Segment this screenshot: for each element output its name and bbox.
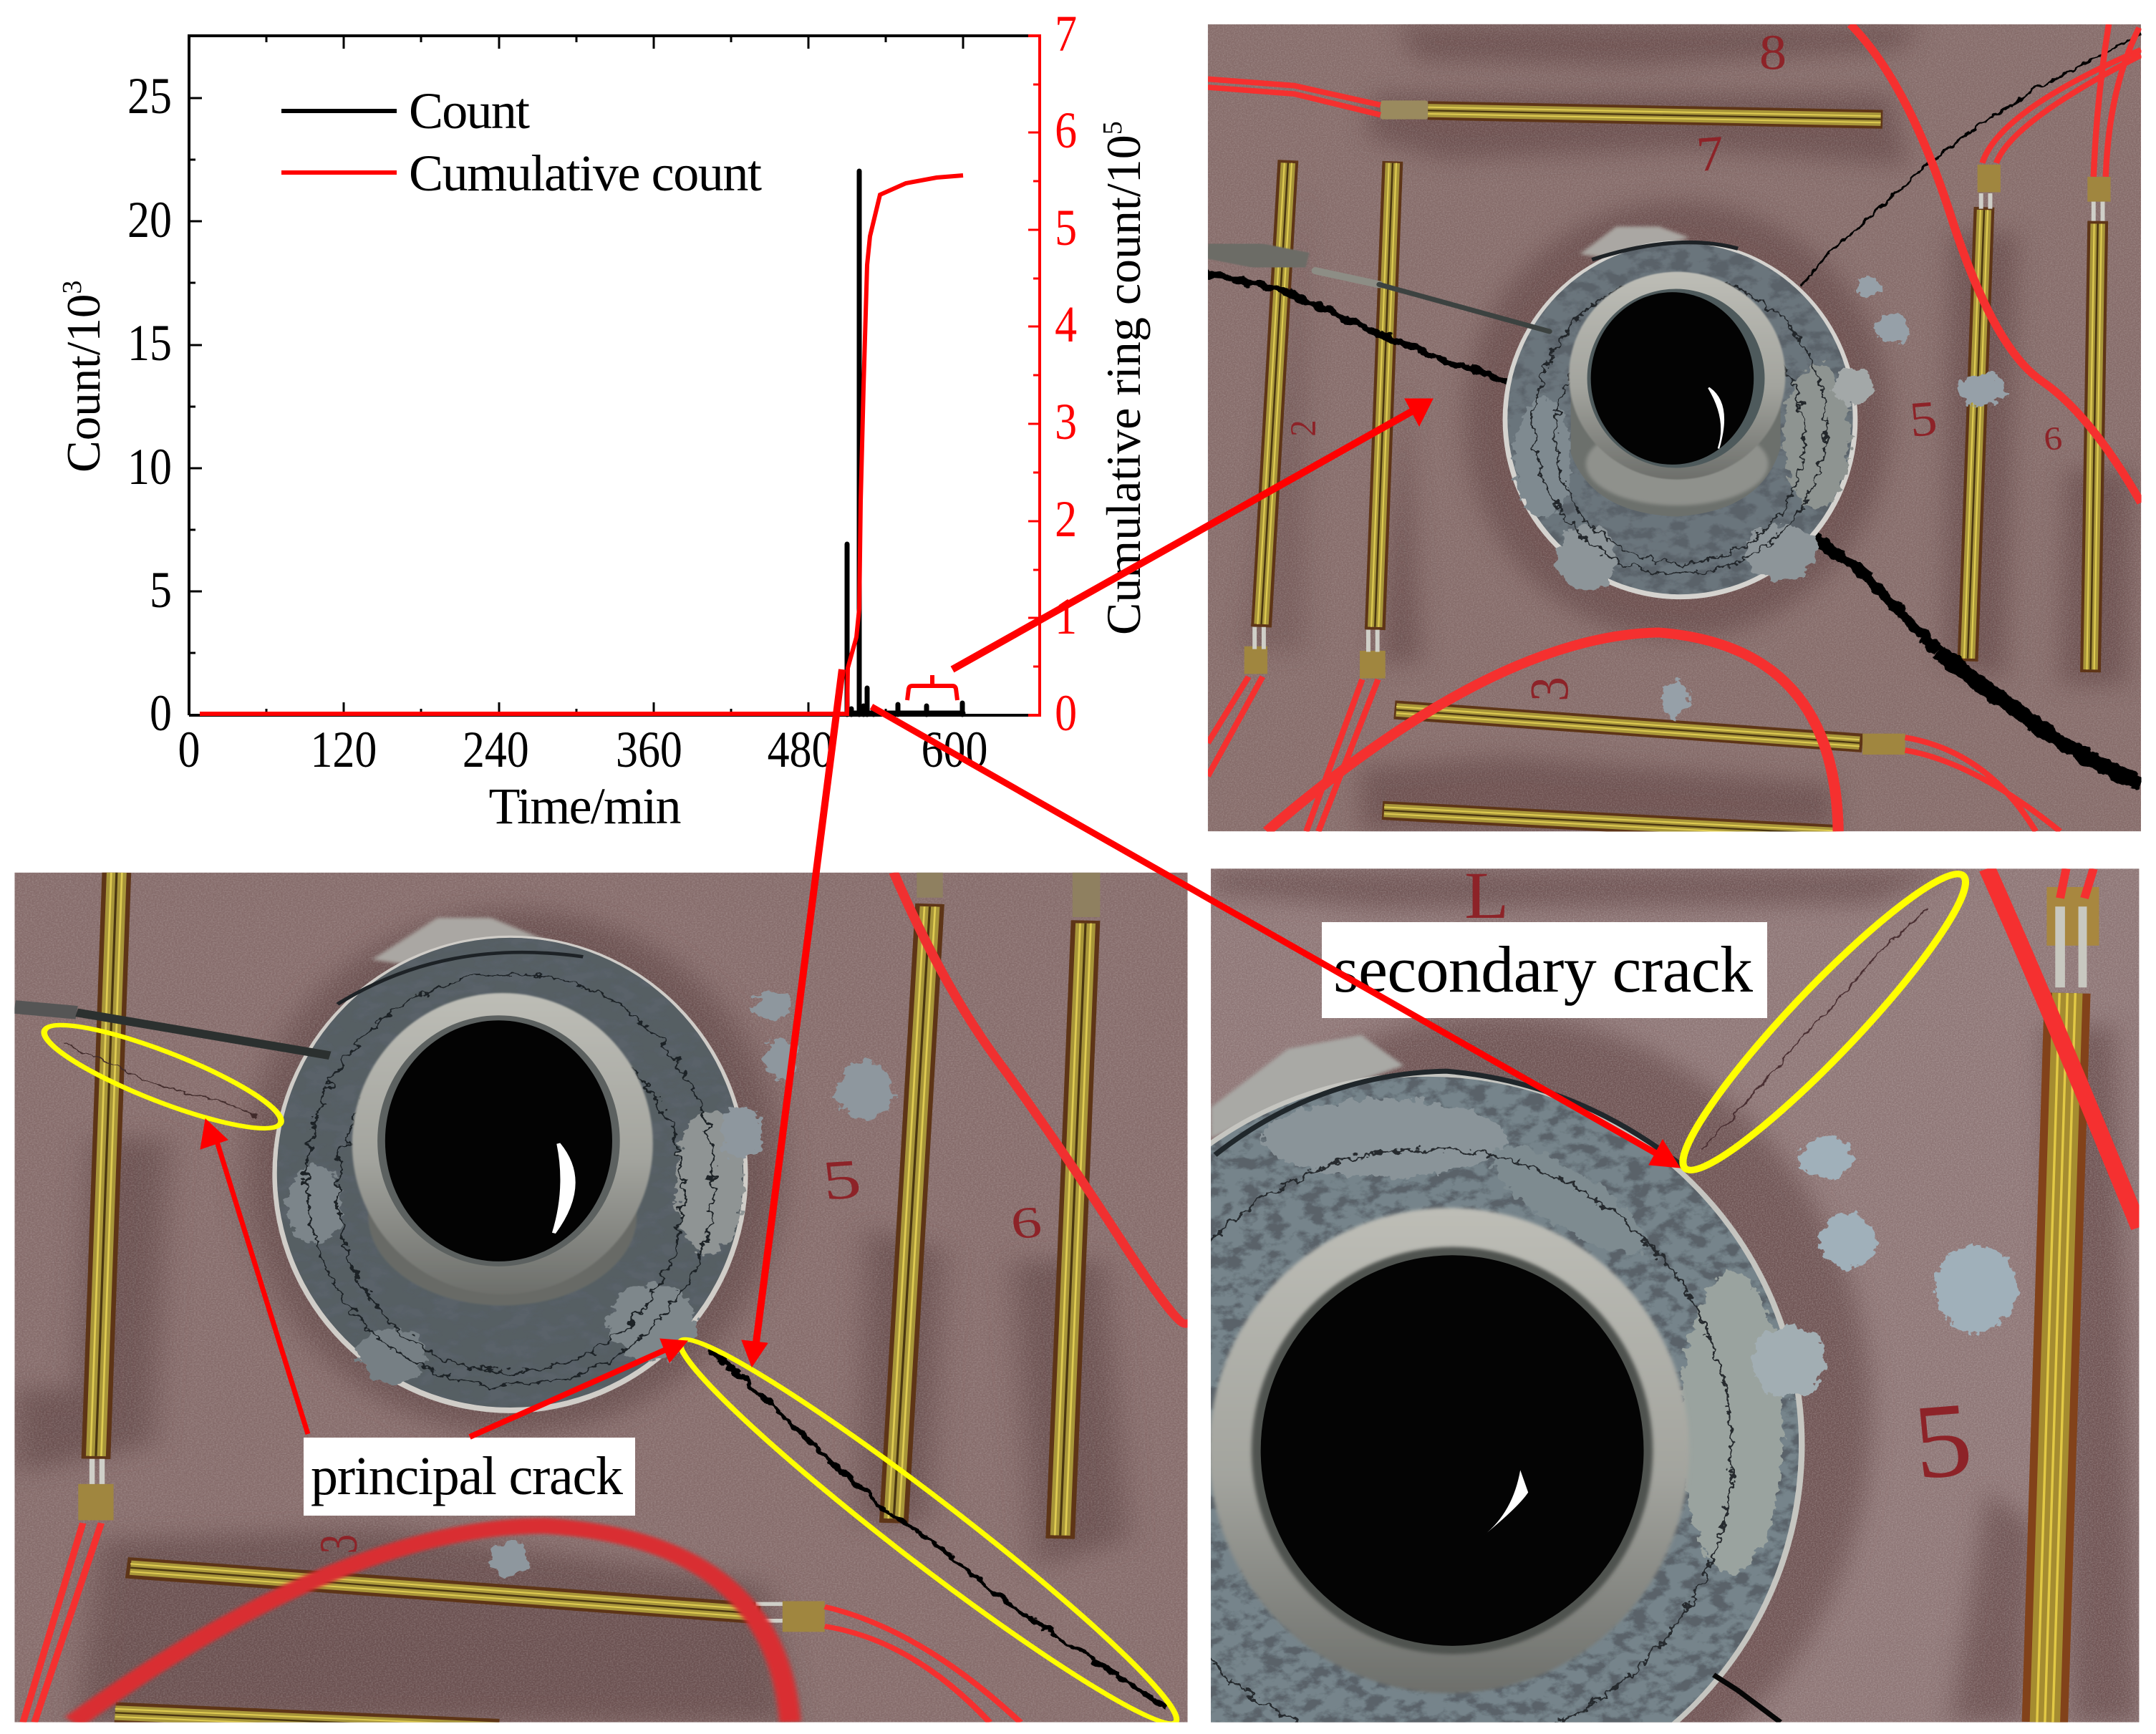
concrete background xyxy=(14,873,1188,1723)
damp stains xyxy=(1118,868,2139,1734)
damp stains xyxy=(1239,24,2133,831)
handwritten gauge numbers: 3 xyxy=(1519,677,1580,702)
left axis tick labels: 15 xyxy=(127,314,172,372)
concrete background xyxy=(1208,24,2141,831)
left axis tick labels: 5 xyxy=(150,561,172,619)
cumulative count series xyxy=(200,175,963,714)
concrete speckle xyxy=(14,873,1188,1723)
crack fragment at pipe base xyxy=(1713,1675,1781,1723)
left axis tick labels: 0 xyxy=(150,684,172,742)
left axis tick labels xyxy=(127,67,172,742)
handwritten gauge numbers: 6 xyxy=(2042,420,2064,457)
gauge connector xyxy=(2046,887,2099,987)
handwritten gauge numbers: 5 xyxy=(819,1148,864,1212)
grout patches xyxy=(1663,277,2006,717)
handwritten gauge numbers xyxy=(310,1148,1045,1554)
handwritten gauge numbers xyxy=(1283,25,2064,702)
strain gauge strips xyxy=(90,873,1091,1733)
pipe with dark water xyxy=(1569,272,1785,516)
right axis tick labels: 3 xyxy=(1055,393,1077,450)
count series xyxy=(847,171,963,715)
handwritten gauge numbers: 6 xyxy=(1008,1198,1045,1249)
red wires xyxy=(1208,24,2141,831)
probe needle xyxy=(1208,246,1550,331)
left axis tick labels: 25 xyxy=(127,67,172,125)
handwritten gauge numbers: 5 xyxy=(1908,1380,1977,1501)
handwritten gauge numbers: 3 xyxy=(310,1534,369,1554)
panel: line chart of count and cumulative ring count xyxy=(57,5,1151,835)
cracks xyxy=(1208,33,2141,785)
handwritten gauge numbers: 2 xyxy=(1283,420,1324,437)
panel: photo of pipe with principal cracks (bottom left) xyxy=(14,873,1203,1734)
pipe with dark water xyxy=(1209,1208,1689,1693)
right axis tick labels: 4 xyxy=(1055,296,1077,353)
handwritten gauge numbers xyxy=(1464,859,1977,1501)
right axis tick labels: 6 xyxy=(1055,102,1077,159)
left axis tick labels: 10 xyxy=(127,438,172,495)
legend: Count xyxy=(409,82,530,140)
grout patches xyxy=(492,991,893,1578)
legend: Cumulative count xyxy=(409,145,762,202)
bottom axis tick labels xyxy=(178,721,987,778)
arrow: chart to bottom-left photo xyxy=(742,669,842,1367)
left axis tick labels: 20 xyxy=(127,191,172,248)
legend xyxy=(281,82,762,202)
red wires xyxy=(1987,868,2139,1227)
gauge connectors xyxy=(1244,100,2111,755)
mortar flange around pipe xyxy=(272,918,748,1413)
right axis tick labels: 0 xyxy=(1055,684,1077,742)
yellow ellipse marker xyxy=(1659,854,1990,1190)
arrow: label to left hairline crack xyxy=(200,1119,308,1434)
handwritten gauge numbers: 8 xyxy=(1759,25,1787,80)
strain gauge strip xyxy=(2037,993,2075,1723)
principal cracks xyxy=(62,1043,1166,1708)
secondary crack hairline xyxy=(1701,909,1926,1149)
bottom axis tick labels: 240 xyxy=(463,721,529,778)
bracket over tail of series xyxy=(907,675,957,700)
callout: secondary crack label: secondary crack xyxy=(1333,933,1753,1006)
callout: principal crack label: principal crack xyxy=(311,1446,623,1506)
right axis tick labels: 1 xyxy=(1055,588,1077,645)
mortar flange around pipe xyxy=(1051,1035,1826,1734)
yellow ellipse markers xyxy=(29,1009,1203,1734)
right axis tick labels: 2 xyxy=(1055,490,1077,548)
right axis title: Cumulative ring count/10 xyxy=(1096,135,1151,635)
concrete background xyxy=(1211,868,2139,1723)
handwritten gauge numbers: 7 xyxy=(1694,125,1726,182)
grout patches xyxy=(1798,1136,2016,1332)
bottom axis tick labels: 600 xyxy=(922,721,987,778)
panel: close-up photo with secondary crack (bottom right) xyxy=(1051,854,2139,1734)
probe needle xyxy=(14,1007,330,1055)
bottom axis tick labels: 120 xyxy=(310,721,377,778)
x axis title: Time/min xyxy=(488,778,682,835)
strain gauge strips xyxy=(1257,107,2102,838)
left axis title: Count/10 xyxy=(57,294,110,473)
right axis tick labels: 5 xyxy=(1055,199,1077,256)
mortar flange around pipe xyxy=(1503,226,1873,599)
bottom axis tick labels: 480 xyxy=(768,721,833,778)
gauge connectors xyxy=(78,873,1100,1632)
concrete speckle xyxy=(1208,24,2141,831)
pipe with dark water xyxy=(352,993,653,1305)
handwritten gauge numbers: L xyxy=(1464,859,1509,933)
bottom axis tick labels: 360 xyxy=(616,721,682,778)
chart axes frame xyxy=(189,36,1040,715)
left axis title: 3 xyxy=(57,281,87,294)
panel: photo of pipe with secondary crack wide open (top right) xyxy=(1208,24,2141,838)
arrow: label to lower crack xyxy=(470,1339,687,1437)
concrete speckle xyxy=(1211,868,2139,1723)
handwritten gauge numbers: 5 xyxy=(1907,390,1940,447)
right axis tick labels: 7 xyxy=(1055,5,1077,62)
damp stains xyxy=(15,909,1128,1723)
right axis title: 5 xyxy=(1098,121,1128,135)
right axis tick labels xyxy=(1055,5,1077,742)
arrow: chart to top-right photo xyxy=(952,399,1433,669)
red wires xyxy=(23,873,1188,1723)
arrow: chart to bottom-right photo xyxy=(871,707,1680,1168)
bottom axis tick labels: 0 xyxy=(178,721,200,778)
